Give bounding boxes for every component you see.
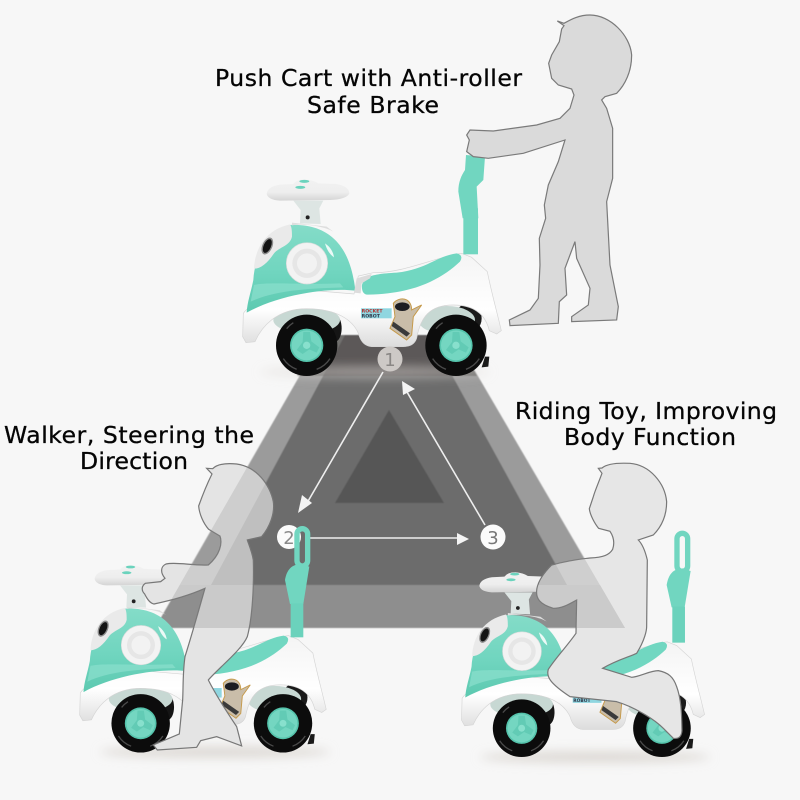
heading: walker: Direction xyxy=(80,447,188,475)
number badge 1: 1 xyxy=(384,350,396,371)
left stage: walker xyxy=(79,462,688,752)
heading: push cart: Push Cart with Anti-roller xyxy=(215,64,522,92)
right stage: riding xyxy=(97,462,705,757)
heading: riding toy: Body Function xyxy=(564,423,736,451)
heading: riding toy: Riding Toy, Improving xyxy=(515,397,777,425)
heading: walker xyxy=(4,421,254,475)
heading: walker: Walker, Steering the xyxy=(4,421,254,449)
heading: riding toy xyxy=(515,397,777,451)
number badge 3 xyxy=(480,524,506,550)
push handle: top xyxy=(458,155,485,254)
number badge 2 xyxy=(277,525,301,549)
child silhouette: riding xyxy=(536,462,683,739)
triangle stage graphic xyxy=(155,335,625,628)
arrow: stage 1 to stage 2 xyxy=(298,372,383,513)
heading: push cart xyxy=(215,64,522,119)
arrow: stage 2 to stage 3 xyxy=(310,533,469,545)
arrow cycle xyxy=(298,372,485,545)
number badge 2: 2 xyxy=(283,528,295,549)
child silhouette: walking xyxy=(142,463,274,751)
number badge 3: 3 xyxy=(487,528,499,549)
child silhouette: pushing xyxy=(467,15,632,326)
ride-on car: top xyxy=(243,179,501,376)
top stage: push cart xyxy=(243,15,632,376)
arrow: stage 3 to stage 1 xyxy=(402,381,485,525)
ride-on car: right xyxy=(462,572,705,757)
heading: push cart: Safe Brake xyxy=(307,91,439,119)
floor shadows xyxy=(100,366,710,763)
ride-on car: left xyxy=(80,565,326,753)
back rest: right xyxy=(667,533,691,643)
number badge 1 xyxy=(378,346,402,372)
push handle: left xyxy=(285,529,309,637)
